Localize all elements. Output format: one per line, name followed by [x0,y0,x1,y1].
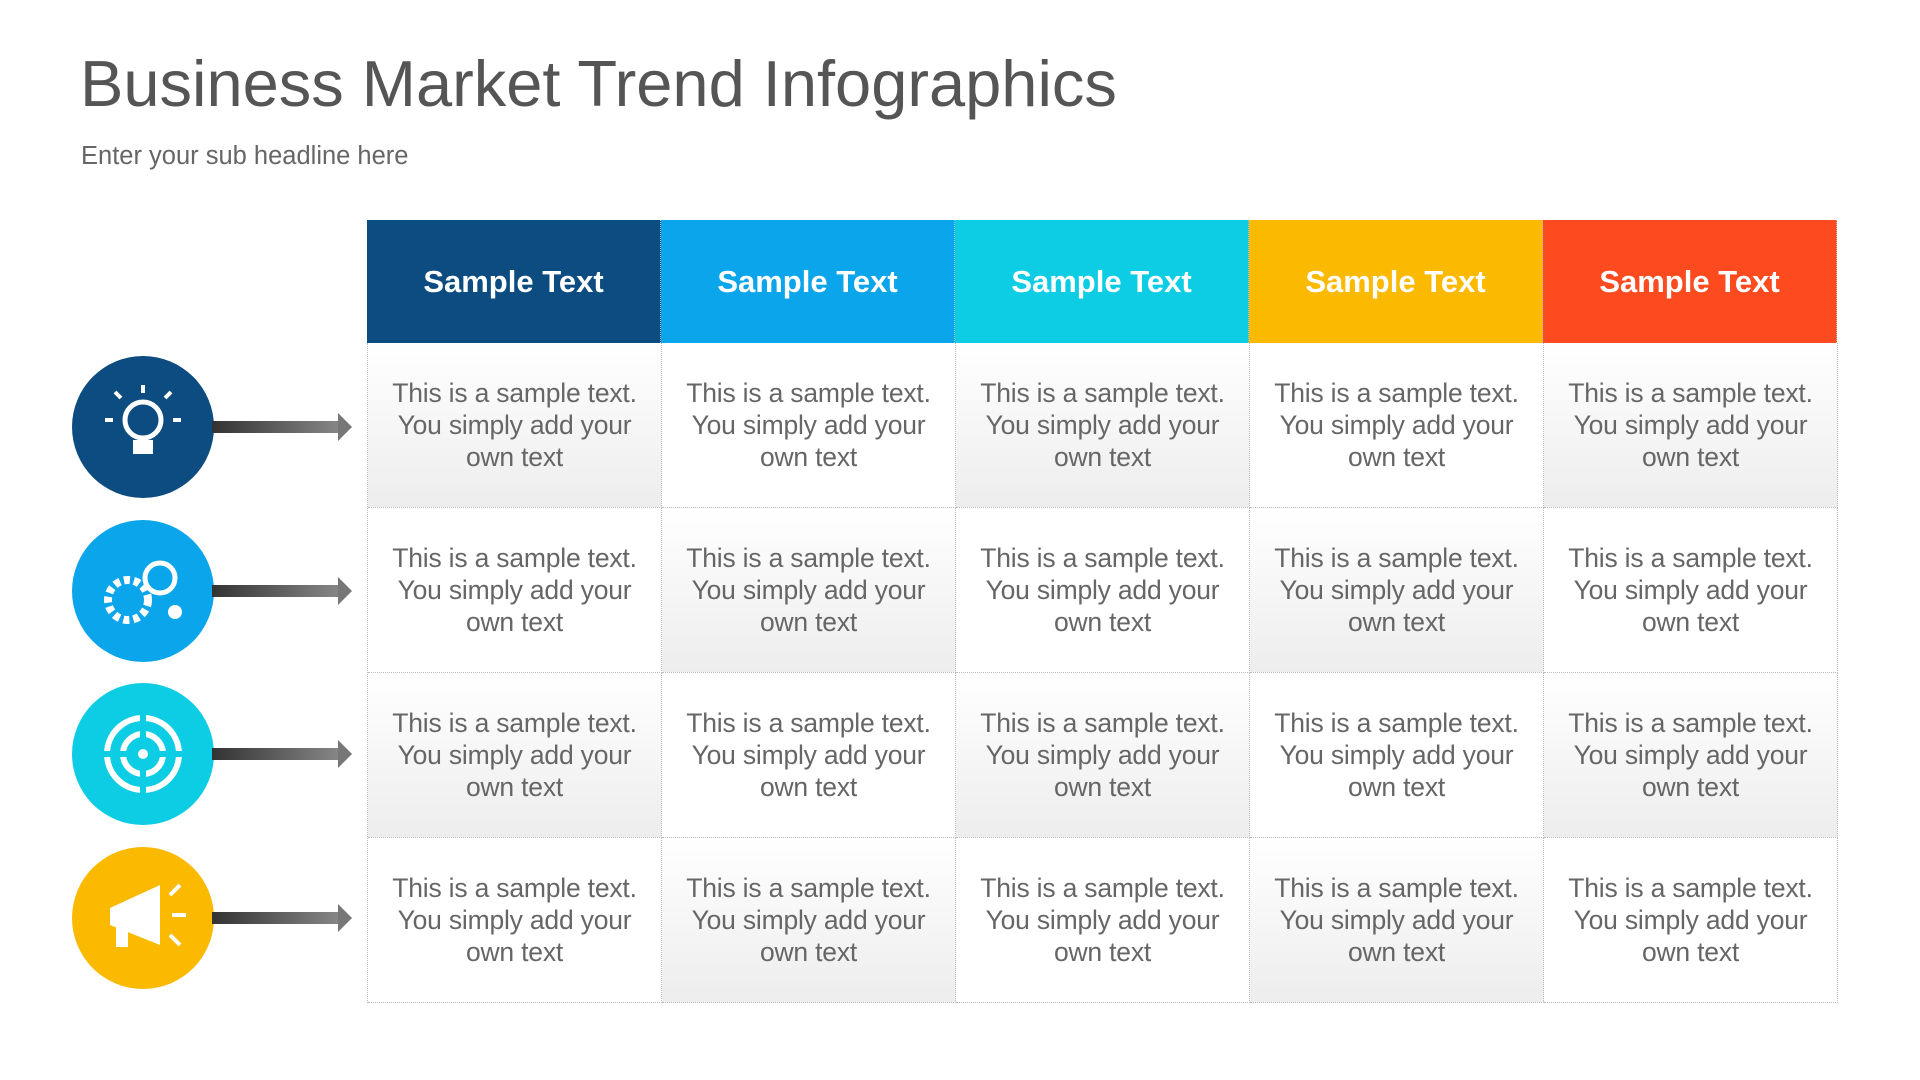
arrow 4 [212,904,352,932]
header: col2: Sample Text [717,264,898,298]
table body: This is a sample text. [1568,543,1813,573]
table body: own text [1642,442,1739,472]
table body: You simply add your [692,410,925,440]
table body: This is a sample text. [1568,873,1813,903]
table body: own text [1054,772,1151,802]
table body: own text [1348,607,1445,637]
title: Business Market Trend Infographics [80,47,1117,120]
table body: This is a sample text. [392,543,637,573]
subtitle: Enter your sub headline here [81,142,408,170]
header: col4 [1249,220,1543,343]
table body: You simply add your [692,575,925,605]
arrow 1 [212,413,352,441]
table body: You simply add your [692,740,925,770]
table body: This is a sample text. [686,873,931,903]
icon: megaphone [72,847,214,989]
table body: You simply add your [986,575,1219,605]
table body: own text [1348,937,1445,967]
header: col4: Sample Text [1305,264,1486,298]
table body: You simply add your [1574,905,1807,935]
table body: You simply add your [986,410,1219,440]
table body: own text [1642,772,1739,802]
table body: This is a sample text. [980,378,1225,408]
table body: own text [466,937,563,967]
table body: own text [1348,442,1445,472]
table body: This is a sample text. [686,378,931,408]
table body: This is a sample text. [1568,708,1813,738]
header: col3 [955,220,1249,343]
table body: own text [1054,937,1151,967]
table body: You simply add your [398,740,631,770]
table body: You simply add your [398,410,631,440]
table body: own text [760,937,857,967]
table body: You simply add your [1574,575,1807,605]
header: col2 [661,220,955,343]
table body: own text [466,607,563,637]
header: col1: Sample Text [423,264,604,298]
table body: This is a sample text. [392,873,637,903]
icon: target [72,683,214,825]
header: col5 [1543,220,1837,343]
icon: lightbulb [72,356,214,498]
table body: This is a sample text. [686,543,931,573]
table body: You simply add your [692,905,925,935]
table body: This is a sample text. [1274,543,1519,573]
table body: This is a sample text. [1274,378,1519,408]
header: col1 [367,220,661,343]
table body [367,343,1838,1003]
table body: own text [1642,937,1739,967]
table body: own text [1348,772,1445,802]
table body: own text [760,442,857,472]
table body: This is a sample text. [1274,708,1519,738]
table body: You simply add your [398,575,631,605]
table body: You simply add your [986,740,1219,770]
arrow 2 [212,577,352,605]
header: col5: Sample Text [1599,264,1780,298]
table body: This is a sample text. [980,543,1225,573]
table body: You simply add your [398,905,631,935]
table body: You simply add your [1574,740,1807,770]
table body: own text [1054,607,1151,637]
arrow 3 [212,740,352,768]
table body: This is a sample text. [392,378,637,408]
table body: This is a sample text. [980,708,1225,738]
table body: This is a sample text. [392,708,637,738]
icons and arrows [72,356,352,989]
table body: You simply add your [1280,740,1513,770]
table body: You simply add your [1280,905,1513,935]
table body: own text [1642,607,1739,637]
table body: You simply add your [1280,410,1513,440]
table body: own text [1054,442,1151,472]
table body: You simply add your [1574,410,1807,440]
icon: gears [72,520,214,662]
table body: This is a sample text. [686,708,931,738]
table body: This is a sample text. [1274,873,1519,903]
table body: own text [466,442,563,472]
table body: own text [760,772,857,802]
table body: This is a sample text. [980,873,1225,903]
table body: own text [466,772,563,802]
table body: own text [760,607,857,637]
header: col3: Sample Text [1011,264,1192,298]
table body: This is a sample text. [1568,378,1813,408]
table body: You simply add your [986,905,1219,935]
table body: You simply add your [1280,575,1513,605]
